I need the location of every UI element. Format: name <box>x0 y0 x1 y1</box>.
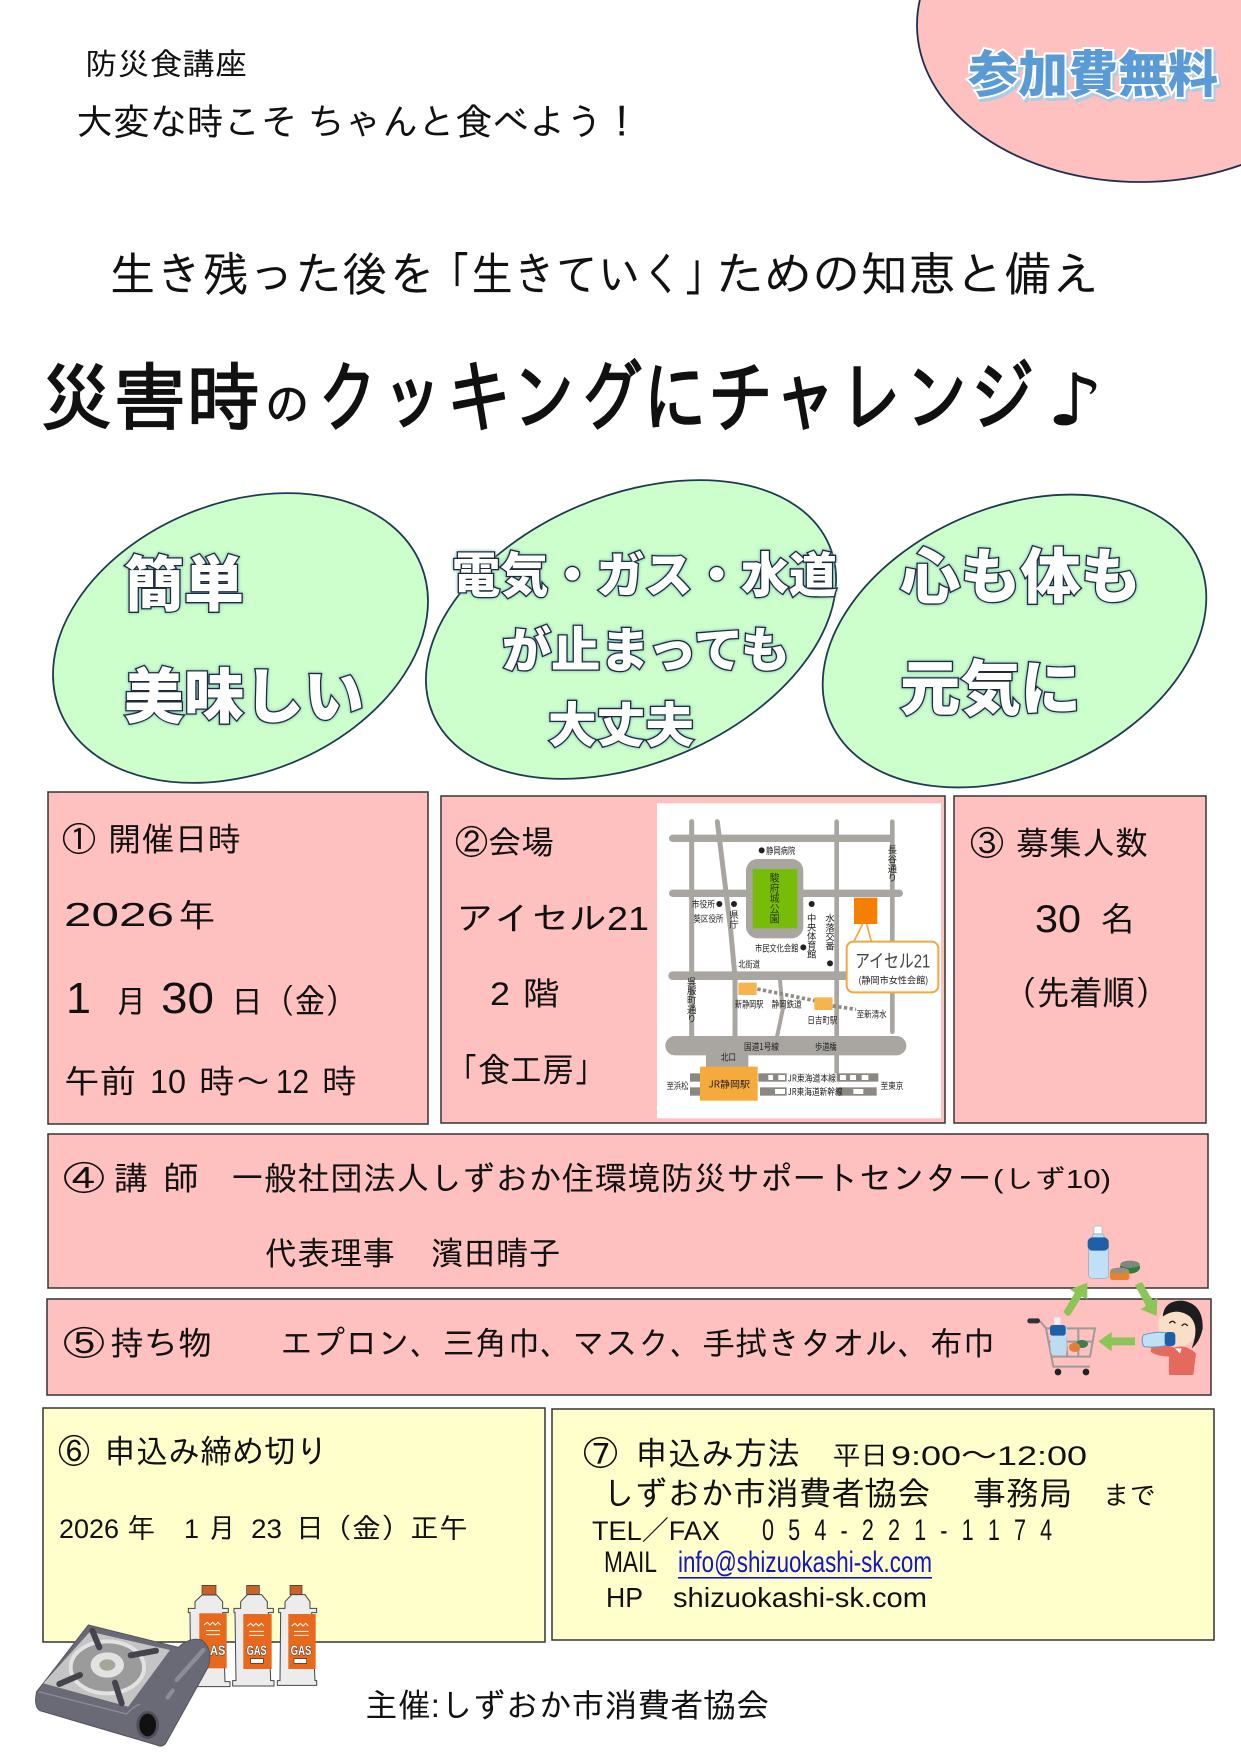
panel 4: instructor: 一般社団法人しずおか住環境防災サポートセンター <box>231 1160 991 1197</box>
panel 6: application deadline: （金）正午 <box>323 1513 468 1544</box>
panel 7: how to apply: shizuokashi-sk.com <box>673 1582 927 1613</box>
course label: 防災食講座 <box>85 47 247 82</box>
panel 1: date and time: 10 <box>150 1063 186 1100</box>
map to venue: 中央体育館 <box>805 913 819 960</box>
panel 1: date and time: ① <box>62 821 96 858</box>
ellipse: even if utilities stop <box>380 422 882 837</box>
panel 6: application deadline: 日 <box>296 1513 324 1544</box>
panel 6: application deadline: ⑥ <box>58 1433 90 1470</box>
panel 3: capacity: 募集人数 <box>1016 825 1148 862</box>
panel 2: venue: 階 <box>523 975 560 1012</box>
panel 1: date and time: 開催日時 <box>108 821 241 858</box>
panel 6: application deadline: 年 <box>127 1513 155 1544</box>
map to venue: 市民文化会館 <box>755 940 798 954</box>
map to venue: アイセル21 <box>855 951 930 972</box>
panel 1: date and time: 時～ <box>199 1063 271 1100</box>
panel 6: application deadline: 2026 <box>59 1514 119 1544</box>
map to venue: 県庁 <box>727 910 741 929</box>
panel 1: date and time: （金） <box>264 983 356 1021</box>
main title <box>40 354 1104 443</box>
icon: gas canisters: GAS <box>247 1642 267 1658</box>
panel 3: capacity <box>954 796 1206 1123</box>
map to venue: 歩道橋 <box>815 1039 837 1053</box>
panel 2: venue: 「食工房」 <box>446 1052 606 1090</box>
map to venue: JR東海道本線 <box>788 1071 837 1085</box>
ellipse: easy and delicious <box>9 440 472 836</box>
panel 3: capacity: 30 <box>1035 898 1081 941</box>
panel 6: application deadline: 1 <box>184 1514 199 1544</box>
panel 2: venue: ②会場 <box>455 824 554 861</box>
tagline: 「生きていく」 <box>428 248 726 301</box>
icon: gas canisters: GAS <box>291 1642 311 1658</box>
panel 7: how to apply: 平日 <box>833 1441 888 1471</box>
panel 1: date and time: 月 <box>115 984 147 1020</box>
panel 4: instructor: 講 <box>114 1160 148 1197</box>
panel 3: capacity: 名 <box>1100 901 1135 939</box>
panel 5: items to bring: 持ち物 <box>110 1325 212 1362</box>
map to venue: 静岡病院 <box>766 843 795 857</box>
main title: クッキングにチャレンジ <box>315 354 1035 443</box>
panel 6: application deadline: 月 <box>208 1513 236 1544</box>
map to venue: 北口 <box>721 1050 736 1064</box>
ellipse: healthy mind and body: 心も体も <box>900 529 1141 616</box>
map to venue: 駿府城公園 <box>767 871 782 925</box>
panel 4: instructor <box>48 1134 1208 1288</box>
panel 4: instructor: 師 <box>163 1160 199 1197</box>
panel 7: how to apply: 申込み方法 <box>635 1435 800 1472</box>
map to venue: JR静岡駅 <box>708 1076 751 1090</box>
ellipse: even if utilities stop: 大丈夫 <box>548 686 694 756</box>
map to venue: 市役所 <box>692 896 715 910</box>
panel 7: how to apply: 0 5 4 - 2 2 1 - 1 1 7 4 <box>762 1512 1052 1547</box>
map to venue: JR東海道新幹線 <box>788 1084 843 1098</box>
panel 1: date and time: 年 <box>178 897 215 934</box>
panel 7: how to apply: TEL／FAX <box>592 1516 720 1546</box>
panel 5: items to bring: ⑤ <box>63 1325 105 1362</box>
panel 1: date and time: 12 <box>276 1063 309 1100</box>
panel 3: capacity: ③ <box>970 825 1004 862</box>
ellipse: even if utilities stop: 電気・ガス・水道 <box>452 536 837 606</box>
panel 2: venue: アイセル21 <box>456 900 649 937</box>
map to venue: 静岡鉄道 <box>772 996 802 1010</box>
icon: gas canisters: AS <box>210 1642 225 1658</box>
map to venue: 新静岡駅 <box>735 996 764 1010</box>
panel 7: how to apply: MAIL <box>604 1546 657 1579</box>
icon: portable gas stove <box>36 1625 210 1746</box>
panel 7: how to apply: info@shizuokashi-sk.com <box>678 1546 932 1579</box>
panel 1: date and time: 日 <box>231 984 263 1020</box>
ellipse: even if utilities stop: が止まっても <box>502 611 790 681</box>
main title: 災害時 <box>40 357 260 440</box>
panel 7: how to apply: 9:00～12:00 <box>891 1441 1087 1471</box>
tagline: ための知恵と備え <box>716 248 1100 301</box>
panel 7: how to apply: しずおか市消費者協会 <box>602 1475 930 1512</box>
panel 6: application deadline <box>43 1408 545 1642</box>
icon: rolling stock cycle <box>1027 1226 1203 1375</box>
panel 7: how to apply: HP <box>606 1582 643 1613</box>
map to venue <box>657 803 941 1118</box>
panel 2: venue: 2 <box>490 976 510 1012</box>
map to venue: 呉服町通り <box>685 977 699 1023</box>
ellipse: healthy mind and body <box>777 438 1241 844</box>
panel 2: venue <box>441 796 945 1123</box>
panel 4: instructor: ④ <box>63 1160 105 1197</box>
map to venue: 至新清水 <box>857 1006 887 1020</box>
ellipse: easy and delicious: 簡単 <box>124 537 244 624</box>
map to venue: 水落交番 <box>823 913 837 951</box>
tagline: 生き残った後を <box>109 248 435 301</box>
tagline <box>109 248 1100 301</box>
panel 7: how to apply: ⑦ <box>583 1435 618 1472</box>
main title: ♪ <box>1046 358 1104 442</box>
main title: の <box>265 379 309 431</box>
panel 1: date and time <box>48 792 428 1124</box>
icon: gas canisters <box>188 1585 317 1687</box>
panel 4: instructor: 代表理事 <box>265 1235 395 1272</box>
panel 1: date and time: 午前 <box>64 1063 136 1100</box>
map to venue: (静岡市女性会館) <box>858 972 928 986</box>
panel 1: date and time: 30 <box>161 974 214 1023</box>
panel 7: how to apply: まで <box>1103 1481 1156 1511</box>
map to venue: 長谷通り <box>885 845 899 882</box>
map to venue: 至浜松 <box>667 1078 689 1092</box>
panel 7: how to apply: 事務局 <box>973 1475 1072 1512</box>
ellipse: healthy mind and body: 元気に <box>900 641 1081 728</box>
panel 1: date and time: 時 <box>322 1063 357 1100</box>
panel 3: capacity: （先着順） <box>1004 975 1168 1013</box>
panel 5: items to bring: エプロン、三角巾、マスク、手拭きタオル、布巾 <box>280 1325 995 1362</box>
badge: free participation <box>917 0 1241 182</box>
panel 1: date and time: 1 <box>66 974 91 1023</box>
panel 6: application deadline: 申込み締め切り <box>104 1433 328 1470</box>
badge: free participation: 参加費無料 <box>968 35 1218 107</box>
panel 5: items to bring <box>47 1299 1211 1395</box>
panel 6: application deadline: 23 <box>251 1514 282 1544</box>
ellipse: easy and delicious: 美味しい <box>124 649 364 736</box>
panel 7: how to apply <box>552 1409 1214 1640</box>
subtitle: eat properly: 大変な時こそ ちゃんと食べよう！ <box>76 102 640 143</box>
panel 4: instructor: (しず10) <box>993 1164 1111 1194</box>
map to venue: 北街道 <box>738 957 760 971</box>
map to venue: 日吉町駅 <box>807 1012 838 1026</box>
map to venue: 国道1号線 <box>744 1039 780 1053</box>
organizer: 主催:しずおか市消費者協会 <box>365 1687 769 1724</box>
panel 1: date and time: 2026 <box>64 896 174 933</box>
map to venue: 至東京 <box>881 1078 903 1092</box>
map to venue: 葵区役所 <box>693 911 723 925</box>
panel 4: instructor: 濱田晴子 <box>431 1235 561 1272</box>
